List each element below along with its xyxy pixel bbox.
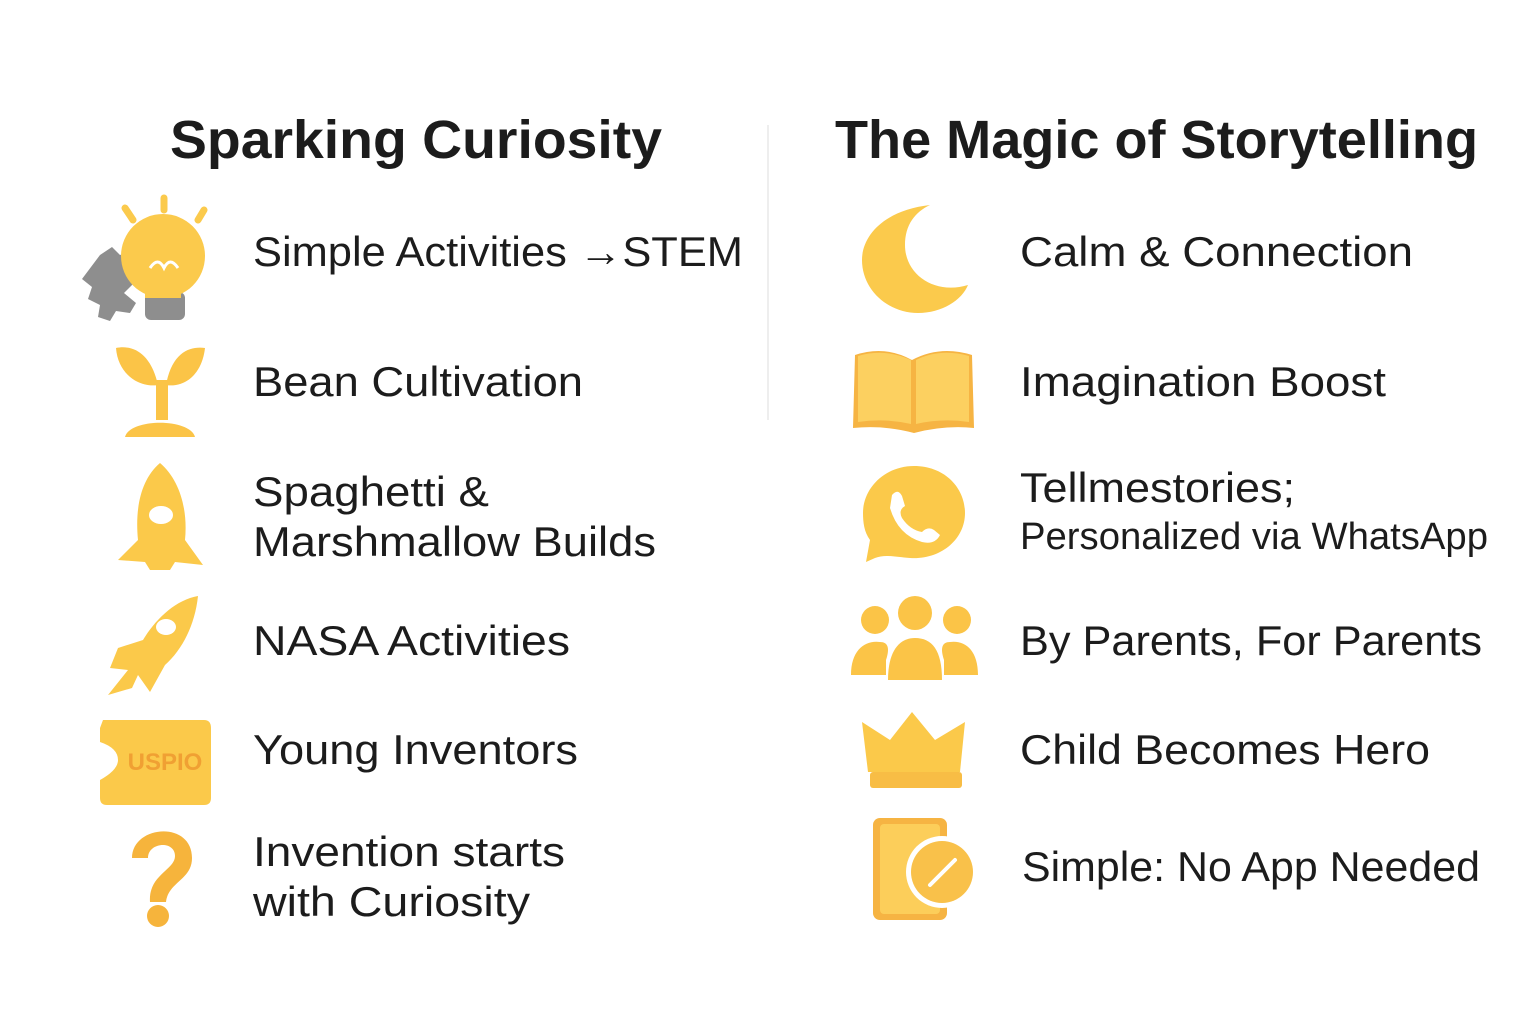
icon: USPIO ticket xyxy=(100,720,211,805)
icon: question mark xyxy=(132,831,192,927)
icon: people xyxy=(851,596,978,680)
title: The Magic of Storytelling: The Magic of Storytelling xyxy=(835,110,1478,170)
text: Tellmestories Personalized via WhatsApp: Tellmestories; xyxy=(1020,464,1295,511)
icon: rocket diagonal xyxy=(108,596,198,695)
text: Young Inventors: Young Inventors xyxy=(253,726,578,773)
icon: bulb with gear xyxy=(82,198,205,321)
text: Child Becomes Hero: Child Becomes Hero xyxy=(1020,726,1430,773)
text: Bean Cultivation: Bean Cultivation xyxy=(253,358,583,405)
icon: book xyxy=(853,351,974,433)
text: Personalized via WhatsApp xyxy=(1020,516,1488,558)
icon: USPIO ticket: USPIO xyxy=(128,749,202,776)
icon: rocket upright xyxy=(118,463,203,570)
icon: moon xyxy=(862,205,968,313)
text: Simple: No App Needed: Simple: No App Needed xyxy=(1022,843,1480,890)
text: Calm & Connection: Calm & Connection xyxy=(1020,228,1413,275)
icon: whatsapp bubble xyxy=(863,466,965,562)
text: Spaghetti & Marshmallow Builds: Spaghetti & xyxy=(253,468,489,515)
icon: phone and compass xyxy=(873,818,978,920)
text: Simple Activities STEM: Simple Activities →STEM xyxy=(253,228,743,275)
text: Invention starts with Curiosity: Invention starts xyxy=(253,828,565,875)
icon: crown xyxy=(862,712,965,788)
icon: sprout xyxy=(116,347,205,437)
text: Imagination Boost: Imagination Boost xyxy=(1020,358,1386,405)
text: By Parents, For Parents: By Parents, For Parents xyxy=(1020,617,1482,664)
text: NASA Activities: NASA Activities xyxy=(253,617,570,664)
text: Marshmallow Builds xyxy=(253,518,656,565)
text: with Curiosity xyxy=(252,878,530,925)
title: Sparking Curiosity: Sparking Curiosity xyxy=(170,110,662,170)
